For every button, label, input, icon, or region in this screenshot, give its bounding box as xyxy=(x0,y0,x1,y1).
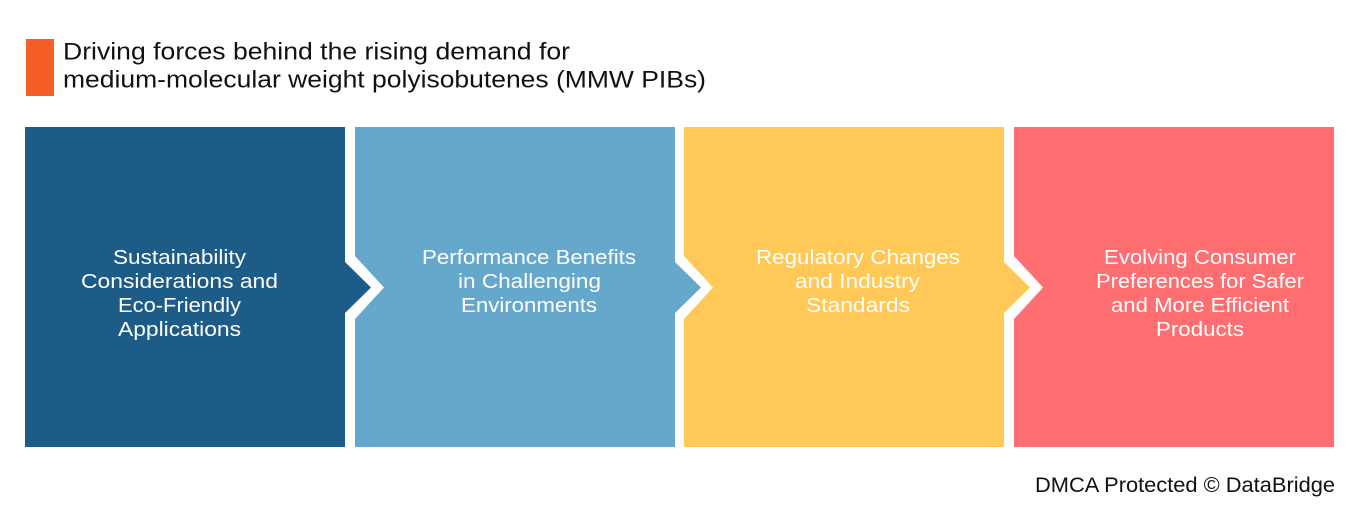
text: consumer label: and More Efficient xyxy=(1111,295,1289,317)
text: regulatory label: and Industry xyxy=(795,271,920,293)
panel: regulatory xyxy=(684,127,1030,447)
text: regulatory label xyxy=(756,247,960,317)
text: performance label: in Challenging xyxy=(458,271,601,293)
panel: consumer xyxy=(1014,127,1334,447)
title xyxy=(63,38,706,94)
panel: performance xyxy=(355,127,701,447)
text: sustainability label xyxy=(81,247,278,341)
text: regulatory label: Standards xyxy=(806,295,910,317)
text: performance label: Environments xyxy=(461,295,597,317)
text: sustainability label: Sustainability xyxy=(113,247,246,269)
icon: orange title marker xyxy=(26,39,54,96)
text: sustainability label: Considerations and xyxy=(81,271,278,293)
text: consumer label xyxy=(1096,247,1304,341)
text: consumer label: Products xyxy=(1156,319,1244,341)
text: performance label xyxy=(422,247,636,317)
text: performance label: Performance Benefits xyxy=(422,247,636,269)
text: consumer label: Evolving Consumer xyxy=(1104,247,1296,269)
text: sustainability label: Applications xyxy=(118,319,241,341)
header xyxy=(26,38,706,96)
title: medium-molecular weight polyisobutenes (MMW PIBs) xyxy=(63,66,706,94)
text: regulatory label: Regulatory Changes xyxy=(756,247,960,269)
title: Driving forces behind the rising demand for xyxy=(63,38,570,66)
footer credit: DMCA Protected © DataBridge xyxy=(1035,474,1335,497)
text: sustainability label: Eco-Friendly xyxy=(118,295,241,317)
text: consumer label: Preferences for Safer xyxy=(1096,271,1304,293)
panel: sustainability xyxy=(25,127,371,447)
